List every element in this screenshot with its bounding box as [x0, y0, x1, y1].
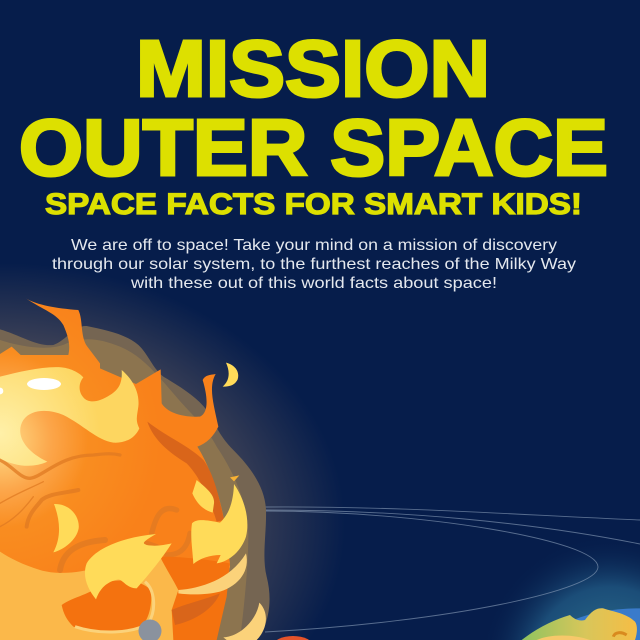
sun yellow flames	[53, 363, 247, 599]
title: MISSION	[136, 24, 490, 113]
orbit lines	[265, 507, 640, 632]
intro text	[52, 237, 576, 292]
sun dark streaks	[0, 454, 190, 570]
planet glow	[470, 530, 640, 640]
sun main body	[0, 298, 230, 573]
sun pale ribbons	[178, 553, 247, 594]
land detail	[537, 635, 590, 640]
sun outer halo	[0, 326, 270, 640]
sun inner halo	[0, 339, 248, 640]
title	[19, 24, 608, 192]
ocean	[553, 608, 640, 640]
sun highlights	[27, 378, 61, 390]
title: OUTER SPACE	[19, 103, 608, 192]
planet: earth	[522, 608, 640, 640]
land	[522, 608, 637, 640]
illustration: sun	[0, 298, 270, 640]
crater	[613, 633, 627, 637]
sun dark ridge	[147, 422, 224, 522]
sun lower light zone	[0, 533, 230, 640]
intro text: We are off to space! Take your mind on a mission of discovery	[71, 237, 557, 254]
intro text: with these out of this world facts about space!	[130, 275, 497, 292]
sun glow	[0, 240, 360, 640]
planet: mercury	[138, 620, 162, 640]
sun dark orange patches	[62, 580, 151, 632]
planet: mars	[273, 636, 313, 640]
sun yellow patch	[0, 367, 139, 466]
subtitle: SPACE FACTS FOR SMART KIDS!	[45, 188, 582, 221]
intro text: through our solar system, to the furthest reaches of the Milky Way	[52, 256, 576, 273]
